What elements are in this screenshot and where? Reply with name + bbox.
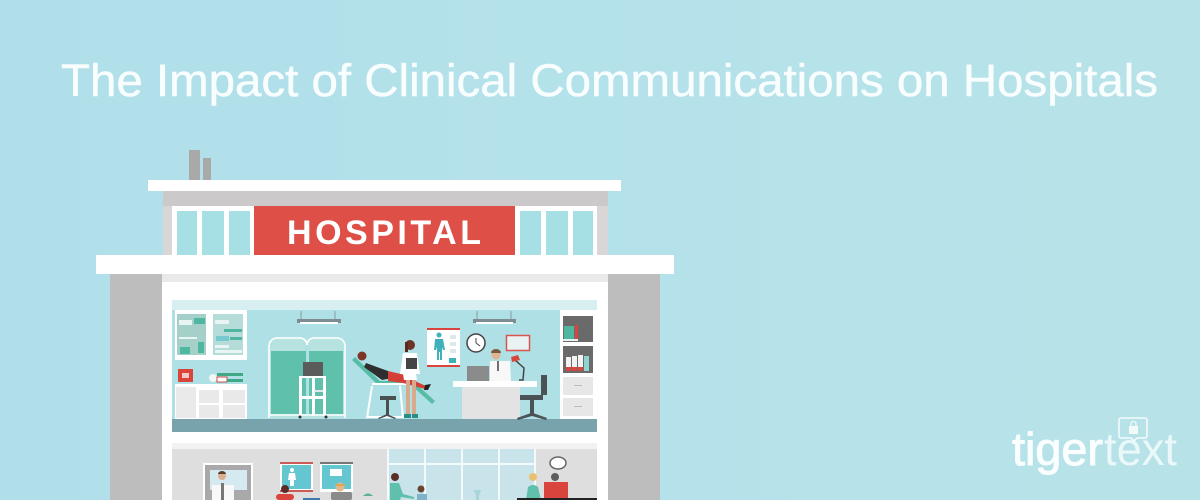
doctor door <box>203 463 253 500</box>
ceiling lamp right <box>473 311 516 324</box>
lobby wall <box>172 443 597 500</box>
lobby window <box>387 449 536 500</box>
hospital building <box>96 150 674 500</box>
medicine cabinet <box>175 310 247 360</box>
left sign windows <box>172 206 254 255</box>
hospital sign: HOSPITAL <box>287 214 481 252</box>
desk lamp <box>511 355 524 380</box>
equipment cart with laptop <box>298 362 328 418</box>
lower drawers <box>175 384 247 419</box>
reception desk <box>517 498 597 500</box>
room floor <box>172 419 597 432</box>
building facade <box>162 274 608 500</box>
office chair <box>517 375 547 420</box>
upper storey wall <box>163 191 608 255</box>
doctor at desk <box>490 349 511 382</box>
first aid kit <box>178 369 193 382</box>
nurse <box>400 340 420 418</box>
patient <box>358 352 431 390</box>
certificate frame <box>506 336 530 350</box>
roof slab <box>148 180 621 191</box>
wall poster scan <box>320 462 353 492</box>
nurse and child <box>390 473 427 500</box>
bookshelf <box>560 310 597 419</box>
desk laptop <box>467 366 489 382</box>
icon: speech bubble lock <box>1119 418 1147 441</box>
panel: lower room lobby <box>172 443 597 500</box>
plant <box>363 494 373 496</box>
desk <box>453 381 537 419</box>
magazine table <box>303 498 320 500</box>
anatomy chart <box>427 328 460 367</box>
speech bubble <box>550 457 566 469</box>
receptionist <box>544 473 568 500</box>
stool left <box>378 396 396 419</box>
title: The Impact of Clinical Communications on Hospitals <box>61 55 1158 106</box>
privacy curtain <box>269 338 345 418</box>
exam table <box>352 357 435 418</box>
hospital sign <box>254 206 515 255</box>
blond visitor <box>526 473 541 500</box>
wordmark light: text <box>1104 423 1177 475</box>
ceiling lamp left <box>297 311 341 324</box>
room wall <box>172 300 597 419</box>
wordmark: tiger <box>1012 423 1103 475</box>
logo: tigertext <box>1012 418 1177 475</box>
seated woman <box>276 485 294 500</box>
wall poster body <box>280 462 313 492</box>
counter supplies <box>209 373 243 382</box>
side pillars <box>110 274 660 500</box>
panel: upper room exam room <box>172 300 597 432</box>
right sign windows <box>515 206 597 255</box>
wall clock <box>467 334 485 352</box>
seated man <box>331 482 352 500</box>
ledge <box>96 255 674 274</box>
water fountain <box>474 490 481 500</box>
chimneys <box>189 150 211 180</box>
